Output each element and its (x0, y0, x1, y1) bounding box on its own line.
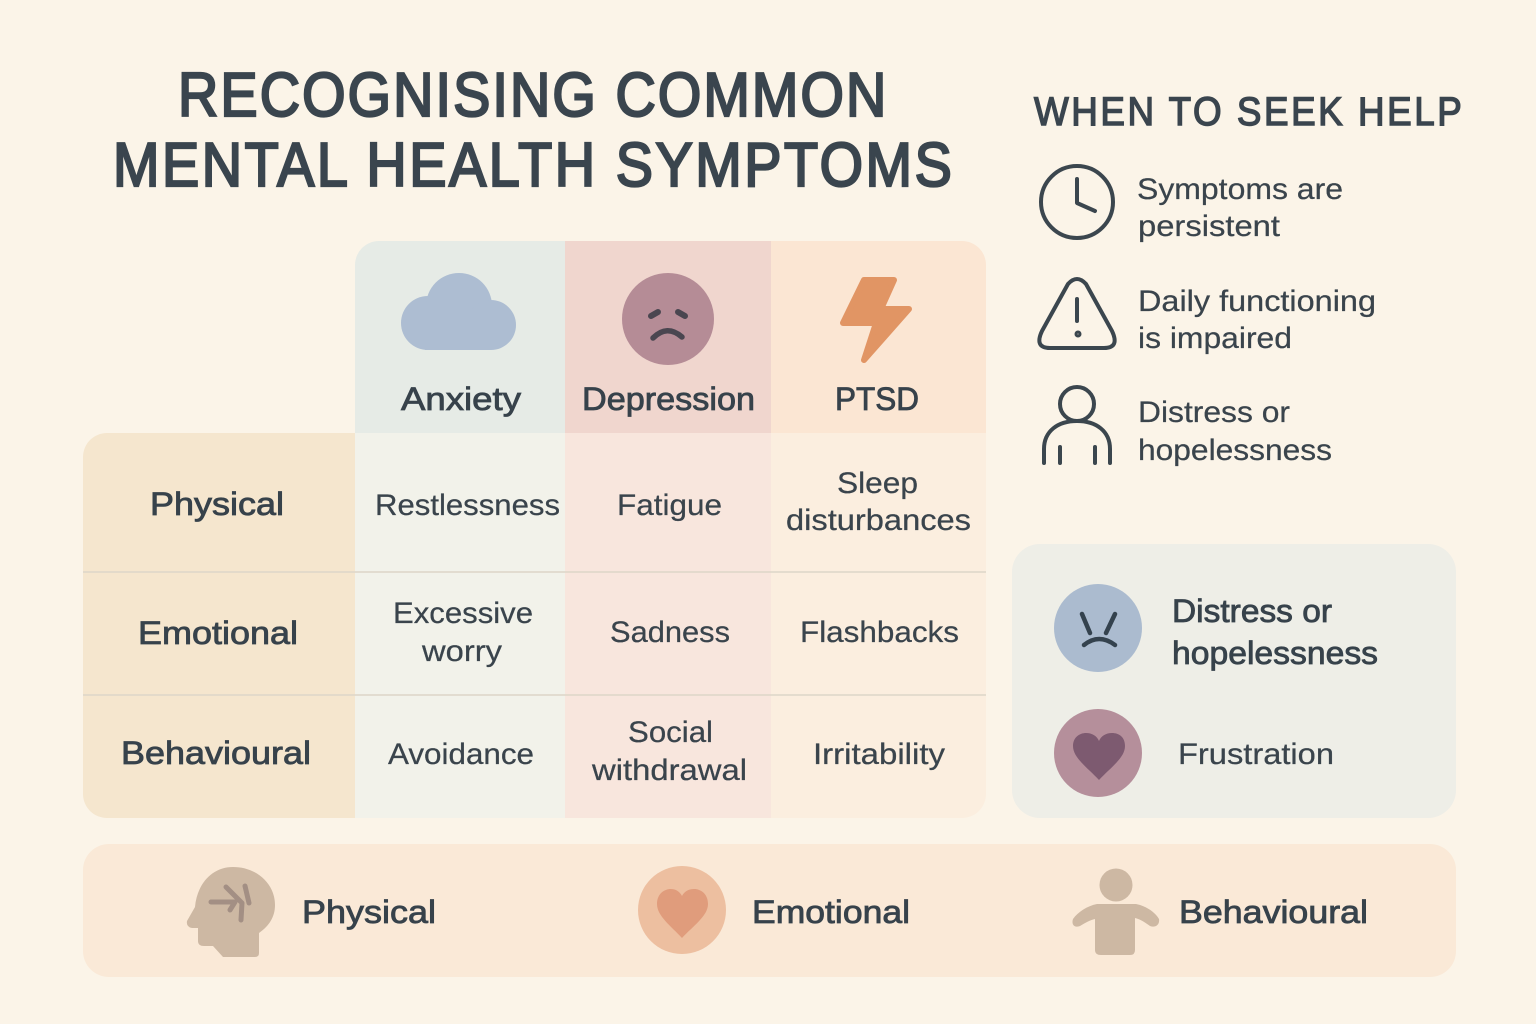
text: distress or hopelessness: hopelessness (1172, 635, 1378, 671)
header: anxiety (355, 241, 565, 433)
text: distress (1138, 396, 1332, 467)
icon: sad face (622, 273, 714, 365)
header: ptsd (771, 241, 986, 433)
icon: lightning bolt (843, 280, 909, 360)
title: RECOGNISING COMMON (178, 61, 886, 130)
icon: clock (1041, 166, 1113, 238)
text: persistent: Symptoms are (1137, 173, 1343, 206)
row: physical: Restlessness (375, 489, 560, 522)
symptom table (83, 241, 986, 818)
row: behavioural: Avoidance (388, 738, 534, 771)
row: physical: disturbances (786, 504, 971, 537)
legend bar (83, 844, 1456, 977)
row labels: Emotional (138, 615, 298, 651)
text: distress: hopelessness (1138, 434, 1332, 467)
row labels: Behavioural (121, 735, 311, 771)
icon: heart (638, 866, 726, 954)
row: emotional: Excessive (393, 597, 533, 630)
row: physical (375, 467, 971, 537)
row: behavioural: Irritability (813, 738, 945, 771)
row: behavioural: Social (628, 716, 713, 749)
row: emotional: worry (421, 635, 502, 668)
icon: frowning face (1054, 584, 1142, 672)
header: depression: Depression (582, 381, 755, 417)
label: behavioural: Behavioural (1179, 894, 1368, 930)
row: emotional: Flashbacks (800, 616, 959, 649)
text: frustration: Frustration (1178, 738, 1334, 771)
text: distress or hopelessness: Distress or (1172, 593, 1332, 629)
row: physical: Sleep (837, 467, 918, 500)
heading: when to seek help: WHEN TO SEEK HELP (1034, 90, 1462, 134)
header: anxiety: Anxiety (401, 381, 521, 417)
column backgrounds (83, 433, 986, 818)
row: emotional (393, 597, 959, 668)
when to seek help (1034, 90, 1462, 467)
icon: person (1072, 868, 1159, 955)
text: functioning (1138, 285, 1376, 355)
row labels (83, 433, 355, 818)
row labels: Physical (150, 486, 284, 522)
text: functioning: is impaired (1138, 322, 1292, 355)
header: depression (565, 241, 771, 433)
text: distress: Distress or (1138, 396, 1290, 429)
row: emotional: Sadness (610, 616, 730, 649)
title (113, 61, 952, 200)
row: behavioural: withdrawal (591, 754, 747, 787)
text: functioning: Daily functioning (1138, 285, 1376, 318)
label: physical: Physical (302, 894, 436, 930)
text: persistent: persistent (1138, 210, 1281, 243)
icon: heart badge (1054, 709, 1142, 797)
label: emotional: Emotional (752, 894, 910, 930)
row: physical: Fatigue (617, 489, 722, 522)
title: MENTAL HEALTH SYMPTOMS (113, 131, 952, 200)
row: behavioural (388, 716, 945, 787)
panel: feelings (1012, 544, 1456, 818)
header: ptsd: PTSD (835, 381, 919, 417)
icon: cloud (401, 273, 516, 350)
text: persistent (1137, 173, 1343, 243)
icon: warning triangle (1039, 279, 1115, 348)
icon: person outline (1044, 387, 1110, 463)
icon: head (187, 867, 275, 957)
text: distress or hopelessness (1172, 593, 1378, 671)
